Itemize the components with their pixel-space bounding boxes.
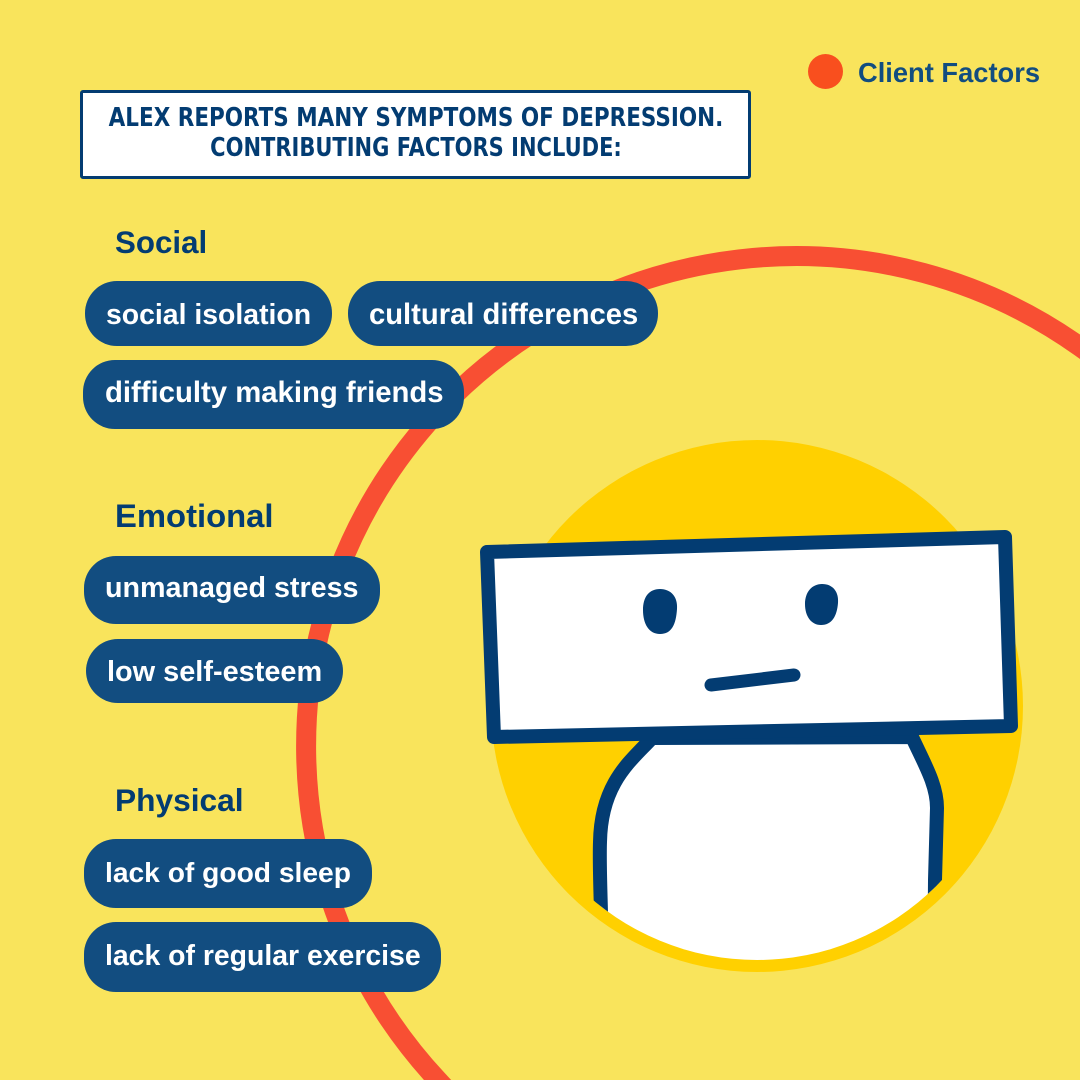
pill: lack of regular exercise <box>84 922 441 992</box>
pill: low self-esteem <box>86 639 343 703</box>
pill: lack of good sleep: lack of good sleep <box>105 856 351 888</box>
pill: unmanaged stress <box>84 556 380 624</box>
background artwork: ring and character <box>296 246 1080 1080</box>
pill: difficulty making friends: difficulty making friends <box>105 376 444 409</box>
pill: lack of regular exercise: lack of regular exercise <box>105 940 421 972</box>
pill: difficulty making friends <box>83 360 464 429</box>
title line 1: ALEX REPORTS MANY SYMPTOMS OF DEPRESSION. <box>108 103 723 133</box>
pill: cultural differences <box>348 281 658 346</box>
pill: social isolation <box>85 281 332 346</box>
pill: cultural differences: cultural differences <box>369 299 638 331</box>
mouth <box>711 675 794 685</box>
right eye <box>805 584 838 625</box>
legend dot <box>808 54 843 89</box>
left eye <box>643 589 677 634</box>
yellow circle <box>491 440 1023 972</box>
pill: unmanaged stress: unmanaged stress <box>105 572 358 604</box>
orange ring <box>306 256 1080 1080</box>
legend: client factors <box>808 54 1040 89</box>
character body <box>592 735 944 960</box>
heading: social: Social <box>115 225 207 260</box>
character head <box>487 537 1011 737</box>
title box <box>80 90 751 179</box>
pill: social isolation: social isolation <box>106 299 311 331</box>
heading: physical: Physical <box>115 782 244 818</box>
pill: lack of good sleep <box>84 839 372 908</box>
legend label: Client Factors <box>858 57 1040 88</box>
title line 2: CONTRIBUTING FACTORS INCLUDE: <box>210 133 621 163</box>
pill: low self-esteem: low self-esteem <box>107 656 322 688</box>
heading: emotional: Emotional <box>115 497 274 534</box>
